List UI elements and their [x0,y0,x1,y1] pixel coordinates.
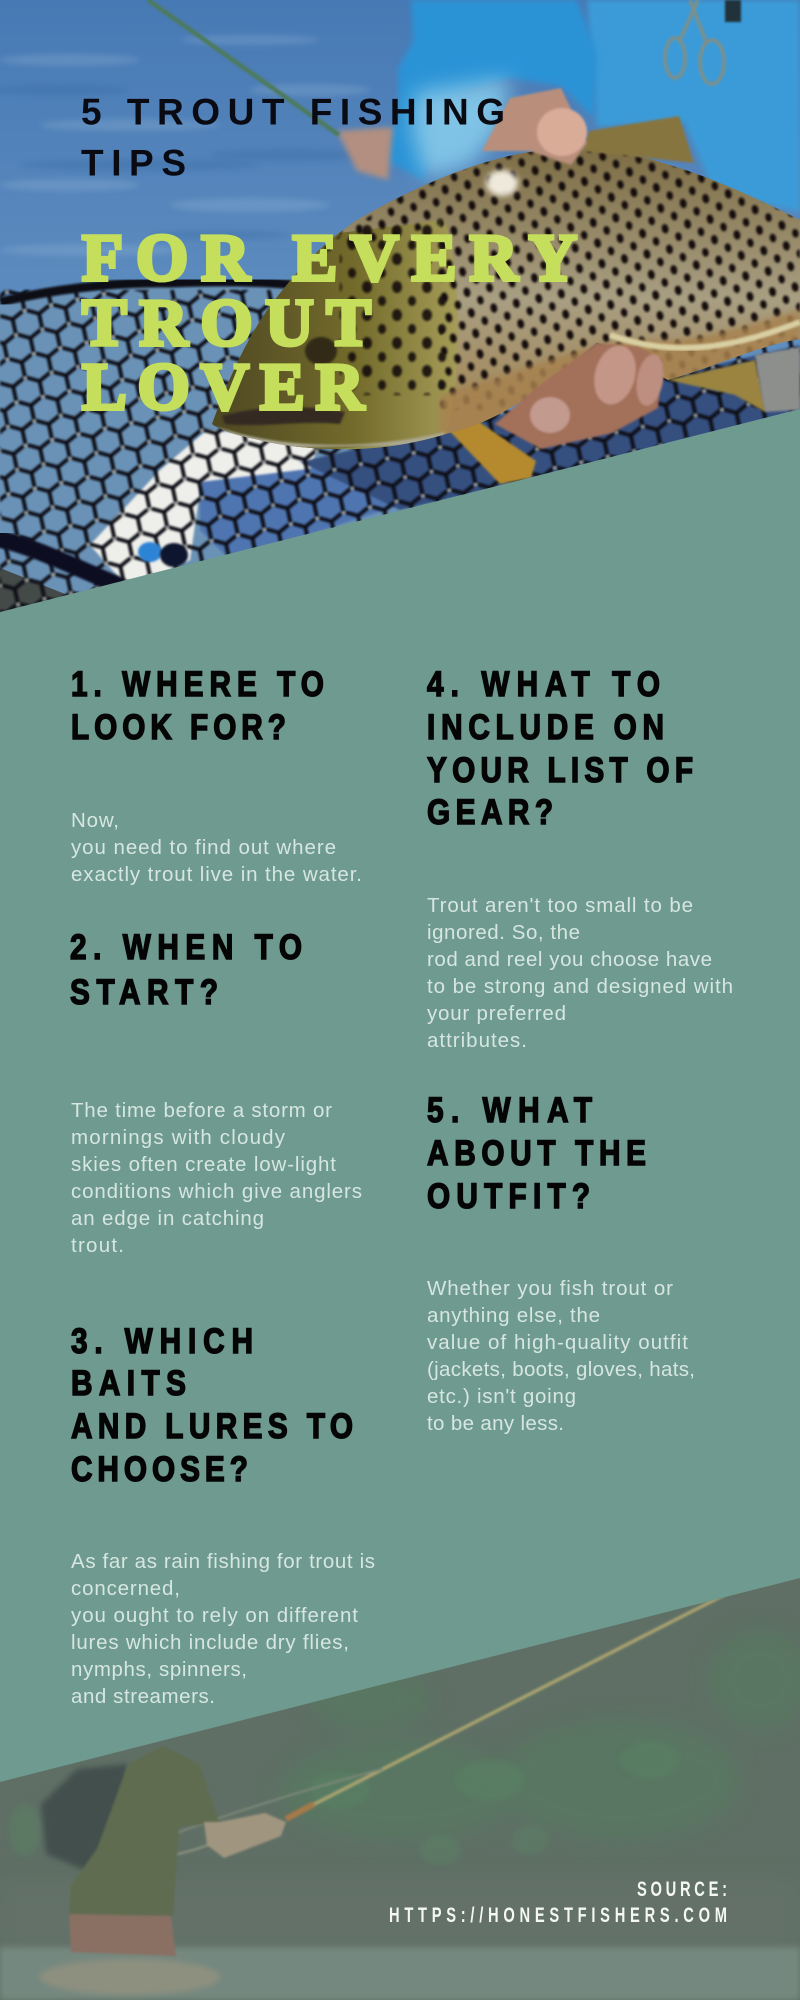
tip 1 heading: 1. WHERE TO [71,665,324,704]
fishing rod [148,0,339,135]
pale sleeve highlight [412,78,510,178]
source credit: SOURCE: [637,1877,727,1901]
fly line and rod [168,1595,724,1856]
blue shirt [587,0,800,212]
belly colour [440,310,800,445]
tip 3 text: As far as rain fishing for trout is [71,1550,375,1573]
tip 3 text: concerned, [71,1577,180,1600]
tip 1 [71,665,362,886]
rear hand [337,127,393,180]
tip 4 heading: YOUR LIST OF [427,751,693,790]
tip 5 text: to be any less. [427,1412,564,1435]
tip 3 text: lures which include dry flies, [71,1631,349,1654]
tip 3 text [71,1550,375,1708]
lower hand [495,341,667,449]
tip 2 heading: 2. WHEN TO [70,928,302,967]
tip 5 heading [427,1091,646,1216]
tip 4 text: Trout aren't too small to be [427,894,693,917]
tip 4 text: attributes. [427,1029,527,1052]
highlighted heading: FOR EVERY [82,221,577,295]
tip 2 heading: START? [70,973,218,1012]
tip 5 text: value of high-quality outfit [427,1331,688,1354]
tip 5 text: etc.) isn't going [427,1385,576,1408]
tip 5 text [427,1277,695,1435]
tip 4 text: ignored. So, the [427,921,580,944]
tip 1 text: exactly trout live in the water. [71,863,362,886]
tip 5 [427,1091,695,1435]
tip 4 heading: 4. WHAT TO [427,665,660,704]
tip 2 [70,928,362,1257]
tip 4 text: your preferred [427,1002,566,1025]
highlighted heading: TROUT [82,286,371,360]
tip 1 text: you need to find out where [71,836,336,859]
spots [440,150,800,410]
tip 4 text: to be strong and designed with [427,975,733,998]
tip 4 heading: GEAR? [427,793,553,832]
tip 2 heading [70,928,302,1012]
tip 3 heading: CHOOSE? [71,1450,248,1489]
pelvic fin [450,422,538,485]
photo: angler holding a brown trout [0,0,800,620]
tip 4 heading [427,665,693,832]
tail section [668,347,800,412]
tip 3 heading: BAITS [71,1364,186,1403]
water [0,0,800,420]
tip 4 text [427,894,733,1052]
tip 3 heading [71,1322,353,1489]
tip 1 heading [71,665,324,747]
tip 3 heading: 3. WHICH [71,1322,253,1361]
tip 2 text: The time before a storm or [71,1099,332,1122]
landing net [0,282,800,620]
tip 2 text [71,1099,362,1257]
tip 5 heading: ABOUT THE [427,1134,646,1173]
forceps on shirt [665,0,741,84]
mouth [222,407,345,425]
tip 2 text: conditions which give anglers [71,1180,362,1203]
highlighted heading [82,221,577,424]
backpack [41,1764,128,1871]
source credit: HTTPS://HONESTFISHERS.COM [389,1903,727,1927]
highlighted heading: LOVER [82,350,365,424]
tip 5 heading: 5. WHAT [427,1091,592,1130]
tip 3 heading: AND LURES TO [71,1407,353,1446]
trout body [200,149,800,460]
tip 4 heading: INCLUDE ON [427,708,664,747]
dorsal fin [582,116,694,163]
tip 2 text: skies often create low-light [71,1153,336,1176]
tip 4 [427,665,733,1052]
tip 1 text: Now, [71,809,119,832]
main heading [81,92,505,184]
tip 5 heading: OUTFIT? [427,1177,590,1216]
tip 2 text: trout. [71,1234,124,1257]
tip 3 text: nymphs, spinners, [71,1658,247,1681]
tip 4 text: rod and reel you choose have [427,948,712,971]
waders [69,1914,176,1956]
fisherman arm [204,1813,286,1858]
fisherman shirt [69,1746,219,1916]
upper hand [482,88,587,165]
tip 3 [71,1322,375,1708]
tip 5 text: (jackets, boots, gloves, hats, [427,1358,695,1381]
sleeve [383,0,597,180]
forest background [0,1570,800,2000]
tip 2 text: an edge in catching [71,1207,264,1230]
river water [0,1947,800,2000]
main heading: 5 TROUT FISHING [81,92,505,132]
tip 2 text: mornings with cloudy [71,1126,286,1149]
source credit [389,1877,727,1927]
tip 1 heading: LOOK FOR? [71,708,286,747]
tip 5 text: Whether you fish trout or [427,1277,673,1300]
photo: fly fisherman wading [0,1570,800,2000]
tip 1 text [71,809,362,886]
tip 3 text: you ought to rely on different [71,1604,358,1627]
tip 3 text: and streamers. [71,1685,215,1708]
head [200,220,458,460]
tip 5 text: anything else, the [427,1304,600,1327]
main heading: TIPS [81,142,186,184]
